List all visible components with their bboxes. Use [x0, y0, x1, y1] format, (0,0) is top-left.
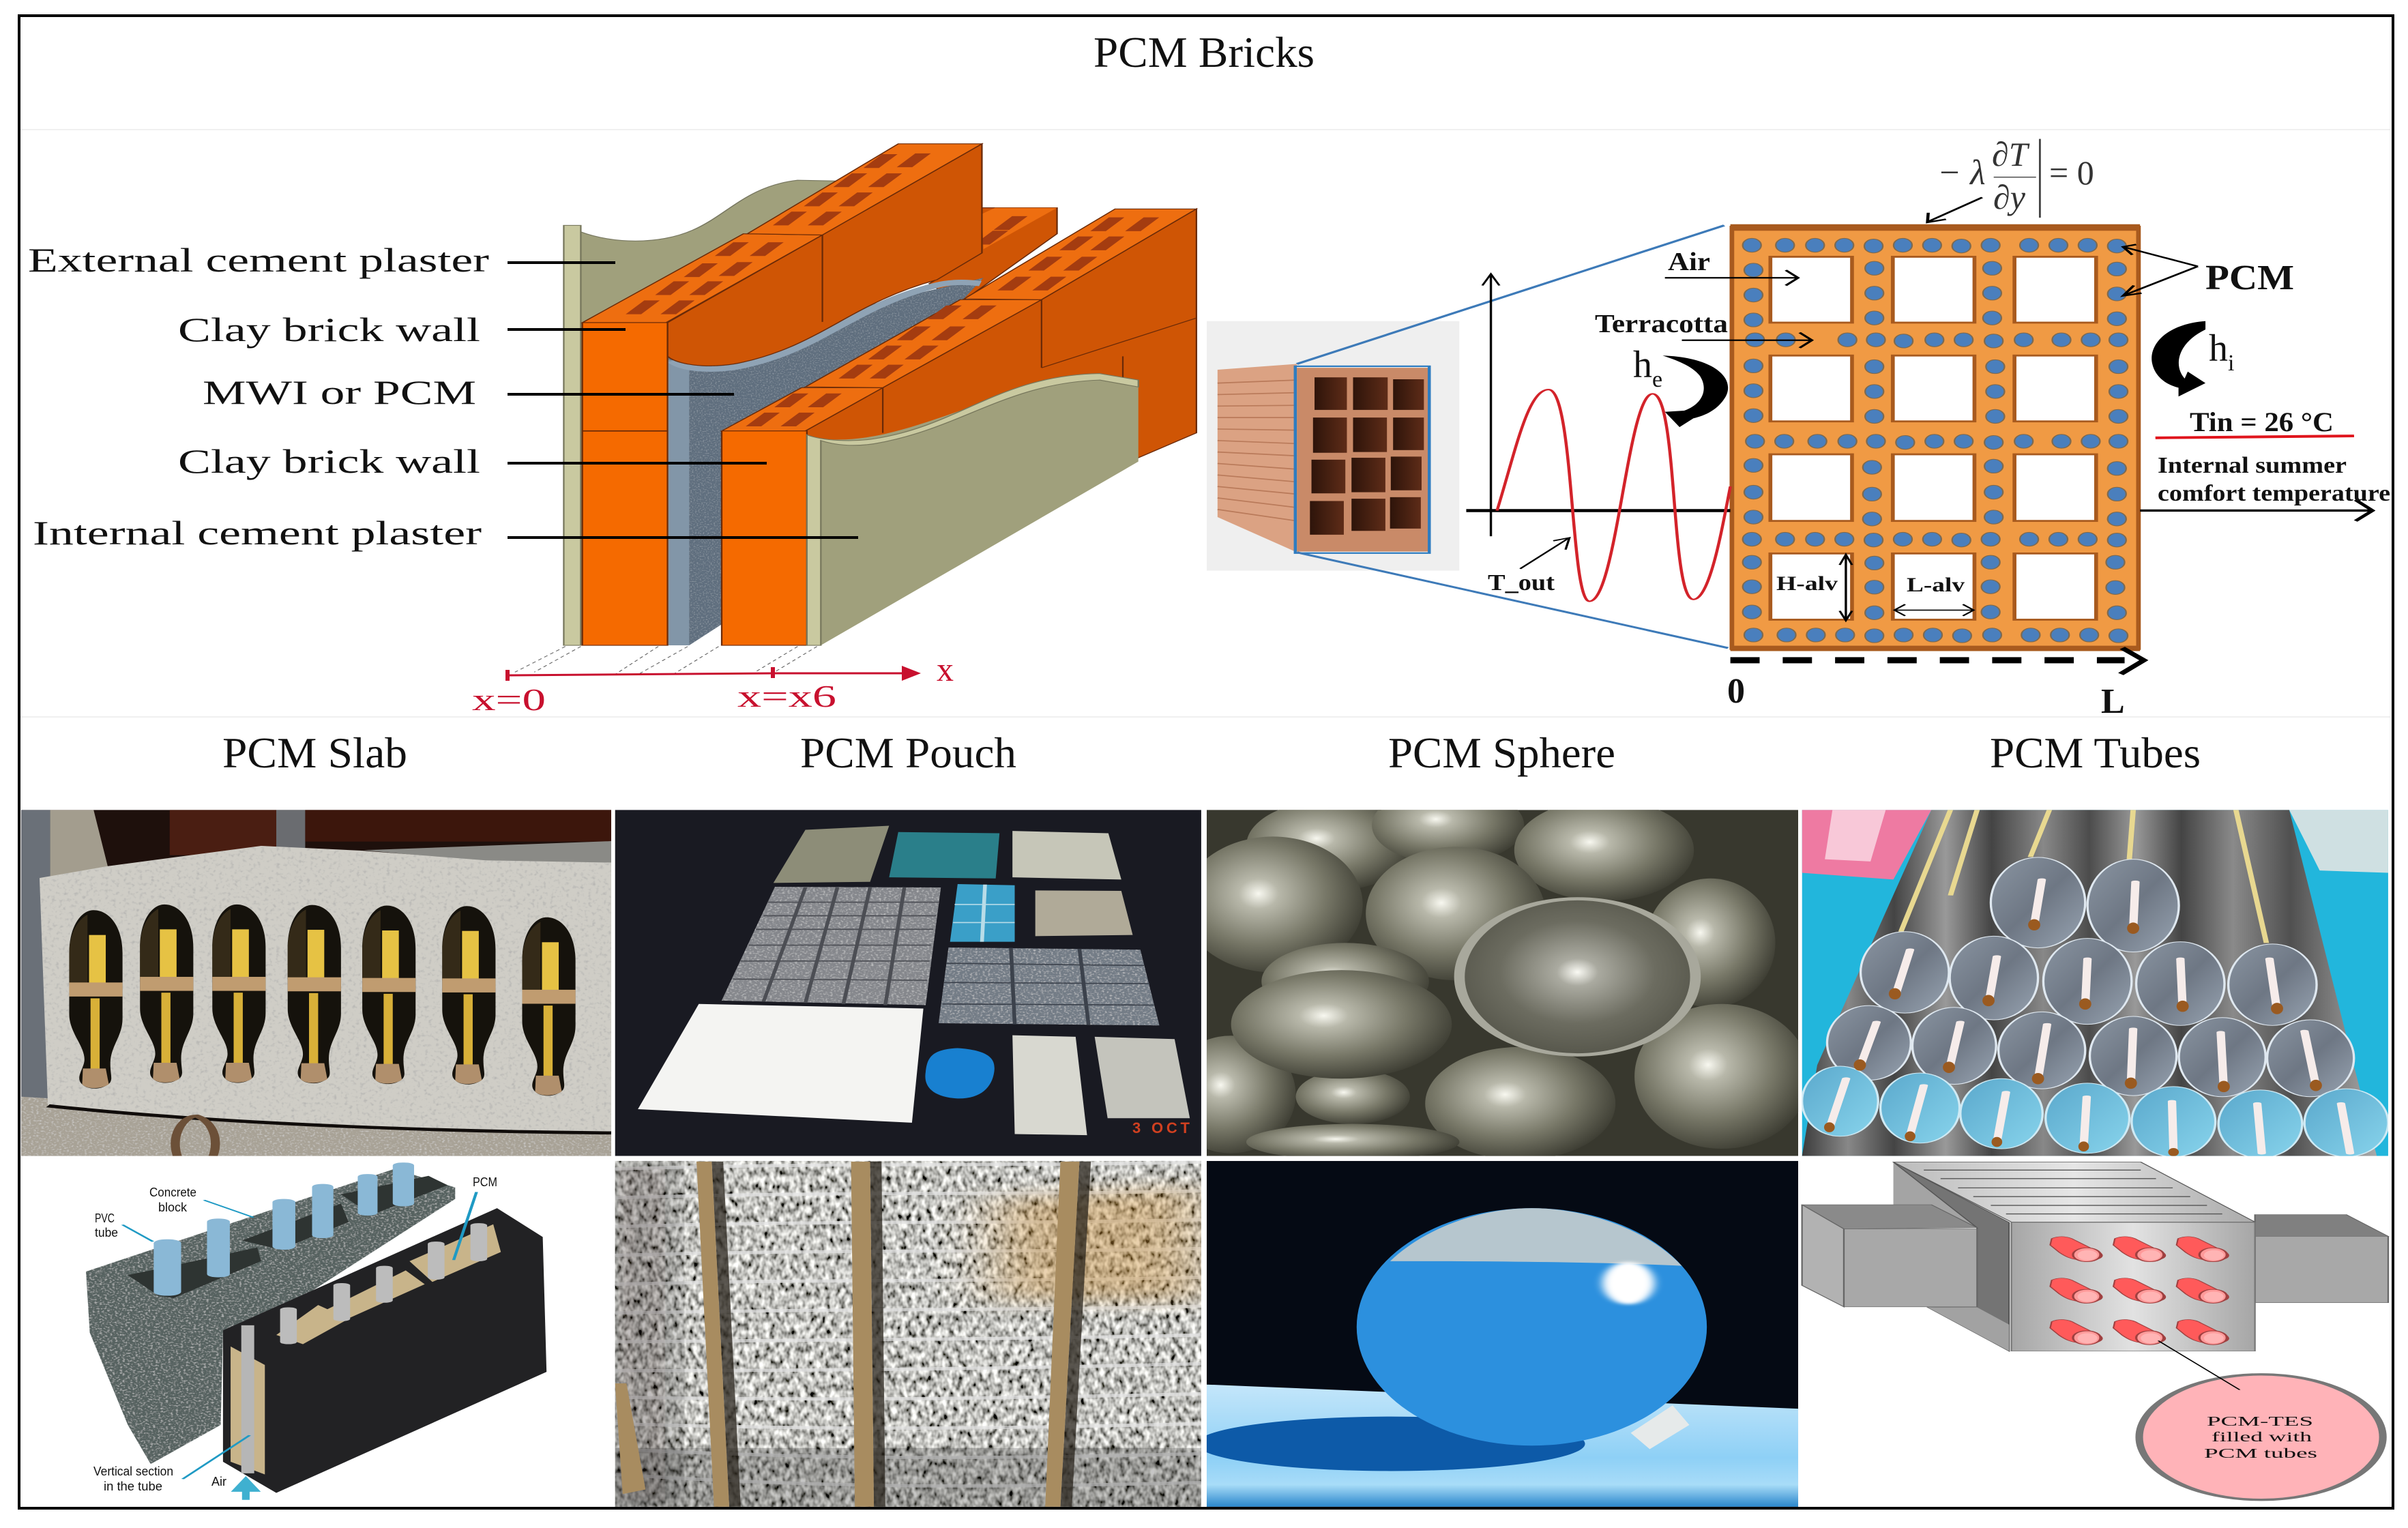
block drawing	[20, 1161, 611, 1507]
label: h e: h	[1633, 344, 1652, 386]
photo: PCM steel tubes	[1802, 810, 2388, 1158]
label: PVC: PVC	[95, 1211, 115, 1225]
label: inside temperature: Tin = 26 °C	[2190, 407, 2334, 437]
hollow brick diagram	[1207, 224, 2140, 651]
panel: hollow brick thermal model	[1207, 135, 2390, 721]
label: tube: tube	[95, 1226, 118, 1239]
heading: PCM Sphere: PCM Sphere	[1388, 729, 1615, 777]
wall drawing	[515, 144, 1196, 674]
boundary condition formula: − λ	[1937, 153, 1986, 192]
label: internal cement plaster: Internal cement plaster	[33, 514, 482, 552]
heading: PCM Slab: PCM Slab	[222, 729, 407, 777]
label: PCM: PCM	[473, 1175, 497, 1189]
label: origin 0: 0	[1727, 672, 1745, 711]
photo date stamp: 3 OCT	[1132, 1119, 1190, 1136]
boundary condition formula	[1937, 135, 2094, 216]
photo: PCM pouches on dark carpet	[615, 810, 1201, 1156]
label: h i: h	[2209, 327, 2228, 370]
label: block: block	[158, 1201, 188, 1214]
label: L: L	[2101, 682, 2125, 721]
callout: PCM-TES: PCM-TES	[2207, 1414, 2313, 1429]
callout: filled with: filled with	[2212, 1430, 2312, 1445]
photo: foil PCM pouches between studs	[615, 1161, 1201, 1507]
label: in the tube: in the tube	[104, 1480, 162, 1493]
label: h e: e	[1652, 367, 1662, 392]
label: MWI or PCM: MWI or PCM	[203, 373, 476, 411]
label: Air: Air	[211, 1475, 226, 1488]
label: h i: i	[2228, 351, 2234, 376]
pouches	[615, 810, 1201, 1156]
leader lines	[508, 263, 858, 538]
label: external cement plaster: External cement plaster	[28, 241, 489, 279]
label: H-alv: H-alv	[1776, 572, 1838, 595]
label: T_out: T_out	[1488, 570, 1555, 596]
boundary condition formula: = 0	[2049, 153, 2094, 192]
photo: blue PCM sphere	[1196, 1161, 1798, 1507]
label: clay brick wall: Clay brick wall	[178, 442, 480, 480]
heading: PCM Tubes: PCM Tubes	[1990, 729, 2201, 777]
photo: PCM metal spheres	[1206, 810, 1798, 1156]
panel: wall section diagram	[28, 144, 1196, 717]
callout: PCM tubes: PCM tubes	[2204, 1446, 2317, 1461]
photo: PCM slab concrete block	[21, 810, 611, 1156]
panel: concrete block with PVC tubes	[20, 1161, 611, 1507]
heading: PCM Pouch: PCM Pouch	[800, 729, 1016, 777]
heat exchanger drawing	[1802, 1161, 2388, 1507]
label: Terracotta: Terracotta	[1595, 310, 1728, 338]
x axis arrow	[508, 666, 921, 681]
label: L-alv: L-alv	[1907, 574, 1965, 596]
label: clay brick wall: Clay brick wall	[178, 310, 480, 349]
panel: PCM-TES tube unit	[1802, 1161, 2388, 1507]
plot axes, sine wave and arrows	[1466, 139, 2373, 674]
boundary condition formula: ∂T	[1992, 135, 2030, 173]
label: Air: Air	[1668, 248, 1710, 276]
label: PCM: PCM	[2205, 259, 2294, 297]
axis label x=0: x=0	[472, 682, 546, 717]
label: Concrete: Concrete	[149, 1186, 196, 1199]
axis label x=x6: x=x6	[737, 679, 836, 714]
label: Vertical section: Vertical section	[93, 1465, 173, 1478]
title: PCM Bricks	[1093, 28, 1315, 76]
axis label x: x	[937, 650, 954, 688]
label: internal summer: Internal summer	[2158, 453, 2347, 478]
label: comfort temperature: comfort temperature	[2158, 481, 2390, 506]
boundary condition formula: ∂y	[1993, 178, 2026, 216]
